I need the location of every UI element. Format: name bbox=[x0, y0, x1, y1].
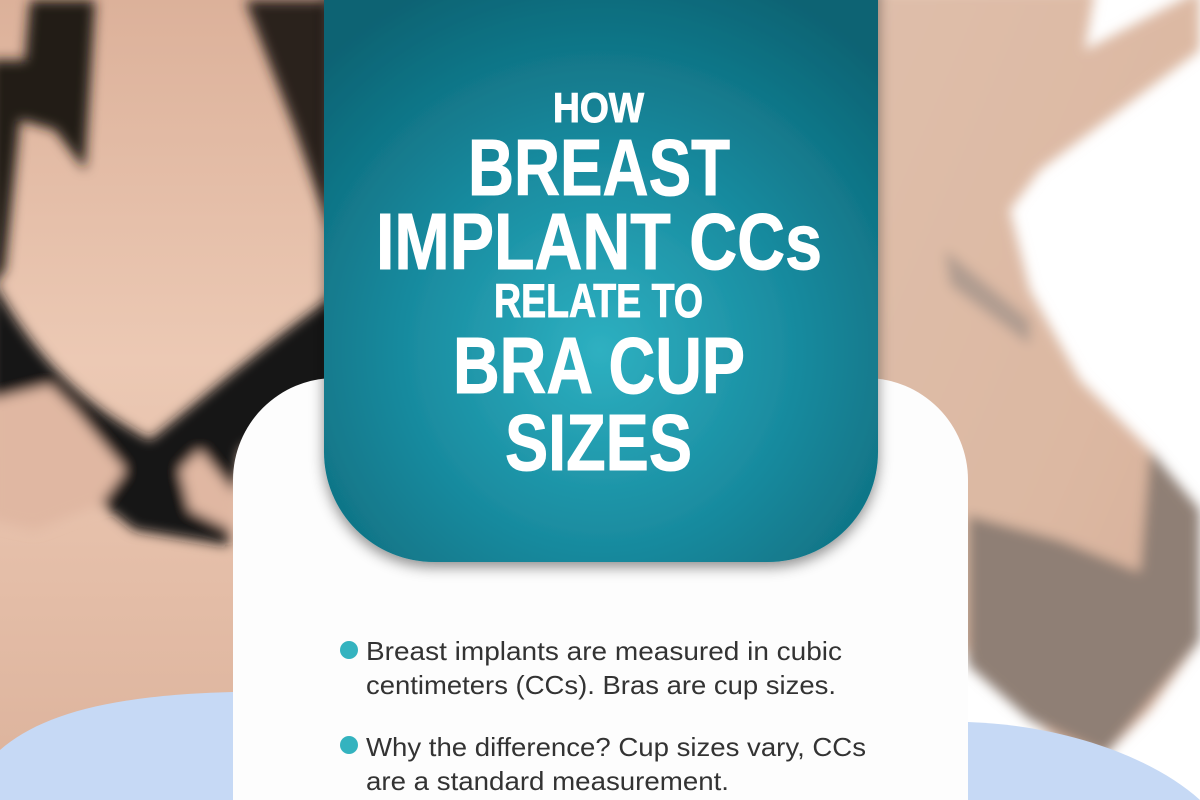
title: SIZES bbox=[505, 398, 692, 487]
title bbox=[376, 84, 822, 487]
white content panel bbox=[233, 378, 968, 800]
title: IMPLANT CCs bbox=[376, 197, 822, 286]
right photo panel bbox=[870, 0, 1200, 800]
bullet point: difference: are a standard measurement. bbox=[366, 766, 729, 796]
bullet point: measurement: centimeters (CCs). Bras are cup sizes. bbox=[366, 670, 836, 700]
bullet point: difference: Why the difference? Cup sizes vary, CCs bbox=[366, 732, 866, 762]
bullet point: measurement: Breast implants are measured in cubic bbox=[366, 636, 842, 666]
bullet point: measurement bbox=[340, 636, 842, 700]
title card bbox=[324, 0, 878, 562]
title: BREAST bbox=[468, 123, 730, 212]
left photo panel bbox=[0, 0, 335, 800]
bullet point: difference bbox=[340, 732, 866, 796]
title: BRA CUP bbox=[453, 321, 745, 410]
title: RELATE TO bbox=[494, 274, 703, 327]
title: HOW bbox=[553, 84, 644, 131]
